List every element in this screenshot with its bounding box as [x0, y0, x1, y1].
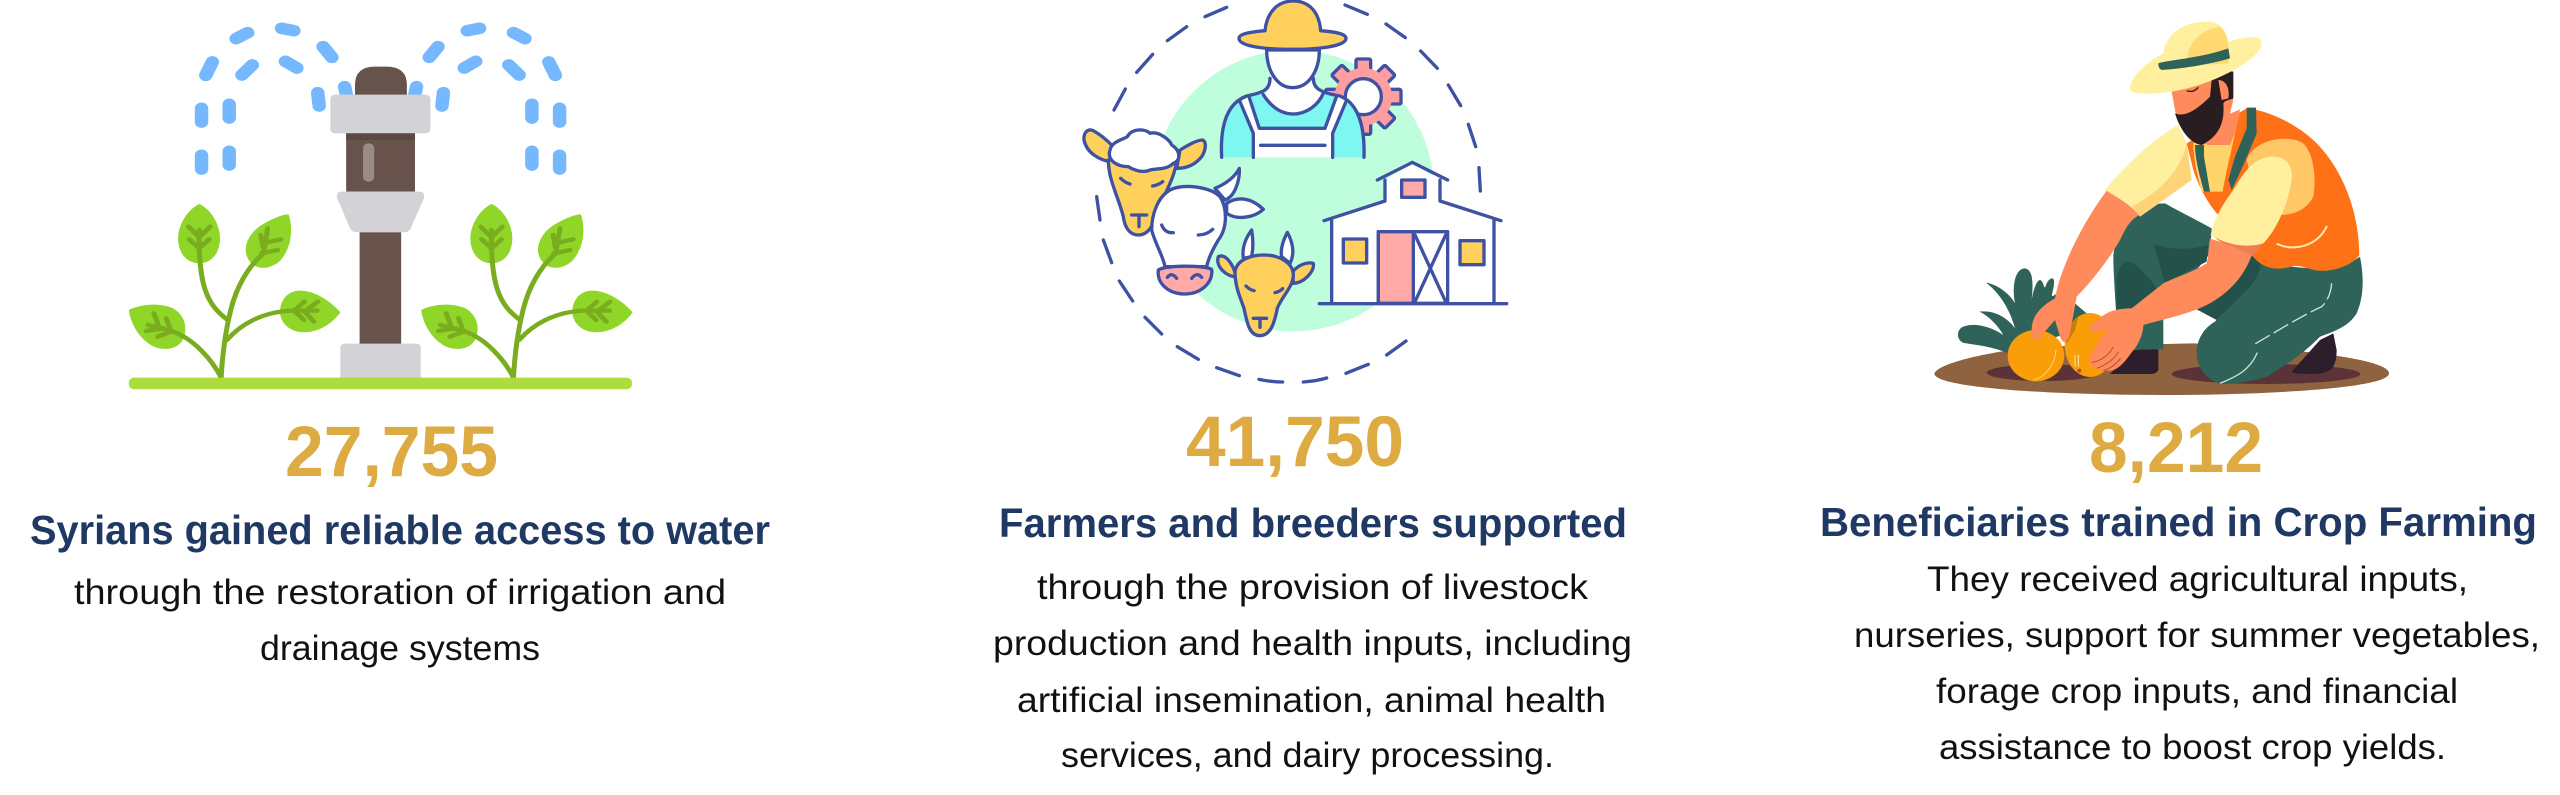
dashed ring [1097, 5, 1480, 382]
head and beard [2172, 71, 2240, 145]
text block: farmers description [993, 568, 1632, 775]
oranges [2008, 313, 2115, 381]
sprinkler cone [337, 192, 424, 232]
text block: water access description: through the restoration of irrigation and [74, 573, 726, 612]
text block: crop farming description: assistance to boost crop yields. [1939, 728, 2446, 767]
back leg [2110, 203, 2212, 374]
heading: farmers and breeders: Farmers and breeders supported [999, 500, 1627, 546]
number: 8,212: 8,212 [2089, 409, 2263, 488]
straw hat [2130, 22, 2262, 94]
text block: farmers description: artificial insemination, animal health [1017, 681, 1606, 720]
left plant [129, 204, 340, 378]
goat [1218, 230, 1313, 336]
front leg [2197, 253, 2363, 384]
ground shadows [1987, 364, 2360, 384]
number: 41,750: 41,750 [1186, 403, 1404, 482]
front arm [2088, 157, 2292, 371]
text block: water access description [74, 573, 726, 668]
icon: sprinkler irrigating plants [129, 28, 633, 389]
icon: farmer harvesting oranges [1934, 22, 2389, 395]
barn [1319, 162, 1507, 304]
text block: crop farming description [1854, 560, 2540, 767]
sprinkler body [346, 133, 415, 192]
farmer [1221, 1, 1364, 157]
water spray droplets [202, 28, 560, 169]
sprinkler stem [360, 232, 401, 344]
panel: water access [30, 28, 770, 668]
right plant [421, 204, 633, 378]
sprinkler collar [330, 95, 430, 133]
cow [1152, 168, 1263, 294]
mint background circle [1153, 50, 1434, 331]
heading: crop farming: Beneficiaries trained in Crop Farming [1820, 499, 2537, 545]
vest [2187, 108, 2359, 271]
soil [1934, 343, 2389, 395]
gear [1326, 59, 1401, 134]
heading: water access: Syrians gained reliable access to water [30, 507, 770, 553]
shirt sleeves [2105, 125, 2263, 257]
text block: crop farming description: forage crop inputs, and financial [1936, 672, 2458, 711]
panel: farmers and breeders [993, 1, 1632, 775]
text block: water access description: drainage systems [260, 629, 540, 668]
text block: farmers description: services, and dairy processing. [1061, 736, 1554, 775]
sheep [1084, 130, 1205, 235]
text block: crop farming description: They received agricultural inputs, [1927, 560, 2468, 599]
text block: farmers description: production and health inputs, including [993, 624, 1632, 663]
text block: crop farming description: nurseries, support for summer vegetables, [1854, 616, 2540, 655]
icon: farmer, livestock and barn [1084, 1, 1507, 382]
leafy plant [1958, 268, 2087, 353]
sprinkler head [355, 67, 407, 95]
number: 27,755: 27,755 [285, 413, 498, 492]
text block: farmers description: through the provision of livestock [1037, 568, 1589, 607]
back arm [2032, 191, 2139, 342]
sprinkler base [340, 344, 421, 379]
panel: crop farming [1820, 22, 2540, 767]
ground strip [129, 378, 632, 389]
